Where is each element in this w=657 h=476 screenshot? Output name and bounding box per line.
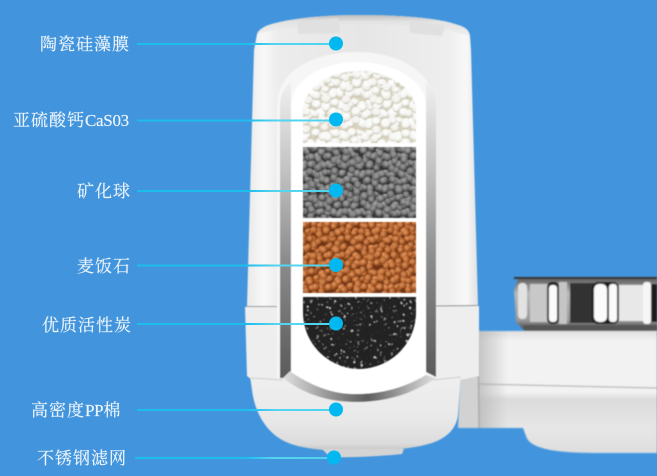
- window dark strips: [280, 82, 291, 378]
- label: 陶瓷硅藻膜: 陶瓷硅藻膜: [40, 35, 130, 54]
- top cap: [257, 15, 470, 36]
- connector arm: [476, 331, 657, 453]
- label: 亚硫酸钙CaS03: 亚硫酸钙CaS03: [13, 111, 129, 130]
- label: 矿化球: 矿化球: [77, 182, 131, 201]
- label: 麦饭石: [77, 257, 343, 276]
- lower bowl: [250, 376, 461, 451]
- label: 麦饭石: 麦饭石: [77, 257, 131, 276]
- media: activated carbon: [303, 297, 416, 369]
- media: white ceramic balls: [303, 71, 416, 143]
- inner white panel: [291, 62, 426, 394]
- upper shell: [247, 15, 478, 306]
- connector collar: [458, 330, 479, 428]
- media: orange maifan stones: [303, 222, 416, 293]
- label: 亚硫酸钙CaS03: [13, 111, 343, 130]
- window bottom arc: [283, 371, 436, 402]
- label: 陶瓷硅藻膜: [40, 35, 343, 54]
- collar band: [245, 306, 479, 380]
- label: 不锈钢滤网: 不锈钢滤网: [37, 449, 127, 468]
- label: 矿化球: [77, 182, 343, 201]
- label: 高密度PP棉: 高密度PP棉: [31, 401, 121, 420]
- faucet connector: [458, 277, 657, 453]
- label: 优质活性炭: [42, 316, 343, 335]
- label: 不锈钢滤网: [37, 449, 341, 468]
- chrome nut: [514, 277, 657, 331]
- filter body: [245, 15, 479, 457]
- filter media stack: [303, 71, 416, 369]
- label: 高密度PP棉: [31, 401, 343, 420]
- window rim: [277, 52, 436, 378]
- media: gray mineral balls: [303, 147, 416, 218]
- label: 优质活性炭: 优质活性炭: [42, 316, 132, 335]
- cap recesses: [298, 18, 445, 36]
- nozzle tip: [322, 449, 404, 457]
